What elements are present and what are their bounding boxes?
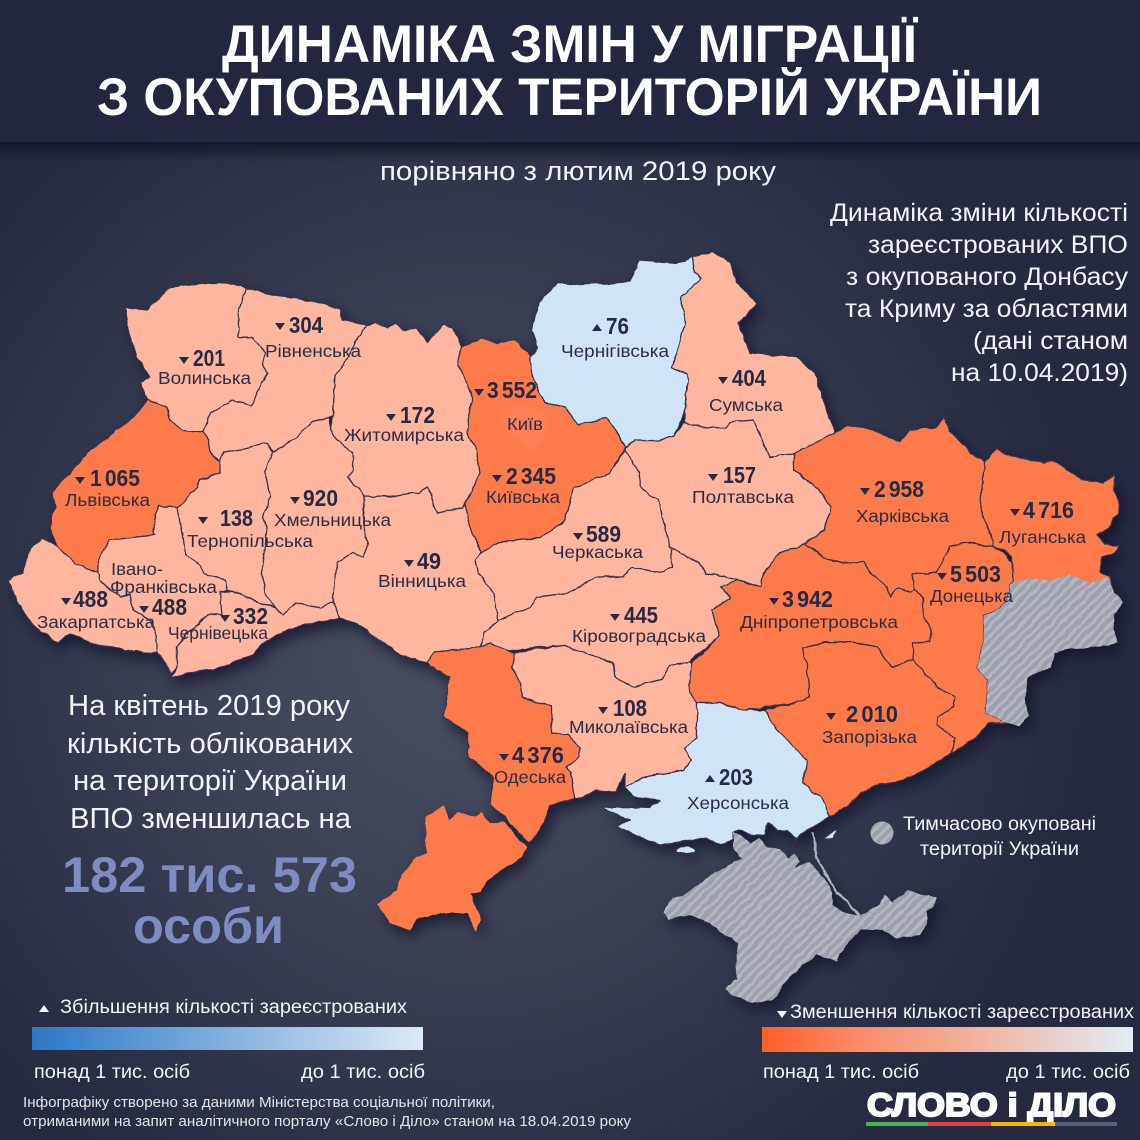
- label: Cherkasy: 589: [586, 521, 621, 547]
- label: Cherkasy: [552, 521, 643, 562]
- legend scale labels: до 1 тис. осіб: [301, 1062, 425, 1083]
- region: Luhansk: [980, 448, 1120, 590]
- legend scale labels: понад 1 тис. осіб: [763, 1062, 919, 1083]
- region: Kyiv city: [500, 405, 547, 457]
- label: Zaporizhzhia: 2 010: [846, 701, 898, 727]
- icon: hatched circle: [870, 822, 894, 844]
- occupied territories text: [903, 814, 1096, 860]
- label: Ivano-Frankivsk: 488: [152, 594, 187, 620]
- label: Odesa: Одеська: [494, 767, 566, 787]
- subtitle: порівняно з лютим 2019 року: [380, 156, 777, 186]
- source note: отриманими на запит аналітичного порталу «Слово і Діло» станом на 18.04.2019 року: [23, 1113, 632, 1130]
- legend scale labels: [34, 1062, 425, 1083]
- label: Kharkiv: Харківська: [856, 506, 949, 526]
- region: Kirovohrad: [480, 547, 739, 687]
- label: Mykolaiv: [569, 695, 688, 737]
- key figure: [62, 847, 357, 954]
- label: Mykolaiv: 108: [613, 695, 647, 721]
- label: Zakarpattia: Закарпатська: [37, 612, 155, 632]
- label: Kyiv oblast: 2 345: [506, 463, 556, 489]
- label: Vinnytsia: Вінницька: [378, 571, 466, 591]
- label: Kyiv city: [474, 377, 543, 434]
- label: Sumy: [709, 365, 783, 415]
- label: Zakarpattia: [37, 586, 155, 632]
- label: Cherkasy: Черкаська: [552, 542, 643, 562]
- region: Vinnytsia: [333, 487, 499, 663]
- label: Donetsk: 5 503: [950, 561, 1001, 587]
- label: Zaporizhzhia: [822, 701, 917, 747]
- region: Zaporizhzhia: [765, 642, 955, 817]
- legend: occupied territories: [870, 814, 1096, 860]
- region: Kharkiv: [793, 417, 993, 597]
- label: Zhytomyr: [344, 402, 464, 445]
- occupied territories text: території України: [920, 839, 1079, 860]
- occupied Crimea: [663, 832, 937, 1002]
- label: Kyiv city: Київ: [507, 414, 543, 434]
- logo colour strip: [866, 1122, 1117, 1126]
- label: Kyiv oblast: Київська: [486, 487, 560, 507]
- label: Kirovohrad: [572, 602, 706, 646]
- region: Donetsk: [912, 542, 1013, 753]
- label: Kherson: [687, 764, 789, 813]
- label: Poltava: 157: [723, 462, 756, 488]
- legend scale labels: [763, 1062, 1130, 1083]
- label: Luhansk: Луганська: [999, 527, 1086, 547]
- summary text: на території України: [73, 765, 347, 797]
- logo wordmark: СЛОВО і ДІЛО: [867, 1087, 1116, 1123]
- label: Khmelnytskyi: 920: [303, 485, 338, 511]
- map description text: (дані станом: [973, 327, 1128, 355]
- legend heading: Зменшення кількості зареєстрованих: [790, 1002, 1135, 1023]
- legend scale labels: понад 1 тис. осіб: [34, 1062, 190, 1083]
- label: Chernihiv: Чернігівська: [561, 341, 669, 361]
- map description text: та Криму за областями: [845, 295, 1128, 323]
- label: Volyn: Волинська: [158, 368, 251, 388]
- label: Zhytomyr: 172: [400, 402, 435, 428]
- label: Vinnytsia: 49: [417, 548, 441, 574]
- label: Ternopil: 138: [220, 505, 253, 531]
- label: Zhytomyr: Житомирська: [344, 425, 464, 445]
- label: Chernivtsi: 332: [233, 603, 268, 629]
- label: Lviv: Львівська: [65, 490, 150, 510]
- label: Dnipropetrovsk: Дніпропетровська: [740, 612, 898, 632]
- region: Ivano-Frankivsk: [98, 506, 227, 673]
- label: Dnipropetrovsk: 3 942: [782, 586, 833, 612]
- gradient bar: [32, 1027, 423, 1050]
- map description text: Динаміка зміни кількості: [830, 199, 1128, 227]
- label: Lviv: 1 065: [90, 465, 140, 491]
- region: Zhytomyr: [330, 322, 480, 513]
- summary text: ВПО зменшилась на: [70, 803, 352, 835]
- gradient bar: [762, 1027, 1133, 1052]
- region: Sumy: [672, 252, 835, 457]
- label: Kirovohrad: 445: [624, 602, 658, 628]
- region: Chernivtsi: [172, 592, 340, 678]
- map labels: [37, 312, 1086, 813]
- label: Kyiv oblast: [486, 463, 560, 507]
- label: Kherson: 203: [719, 764, 753, 790]
- label: Kharkiv: 2 958: [874, 476, 924, 502]
- label: Poltava: [692, 462, 794, 507]
- label: Zaporizhzhia: Запорізька: [822, 727, 917, 747]
- label: Volyn: [158, 345, 251, 388]
- label: Zakarpattia: 488: [73, 586, 108, 612]
- Arabat spit: [813, 832, 860, 916]
- label: Ivano-Frankivsk: Франківська: [110, 577, 217, 597]
- summary text: кількість облікованих: [67, 728, 353, 760]
- header band: [0, 0, 1140, 162]
- label: Khmelnytskyi: [274, 485, 391, 530]
- icon: up triangle: [39, 1005, 49, 1012]
- region: Zakarpattia: [8, 538, 157, 653]
- label: Odesa: [494, 742, 566, 787]
- key figure: особи: [133, 898, 284, 954]
- source note: Інфографіку створено за даними Міністерства соціальної політики,: [23, 1094, 495, 1111]
- label: Ternopil: Тернопільська: [187, 531, 313, 551]
- region: Chernihiv: [531, 257, 701, 447]
- region: Ternopil: [177, 443, 275, 608]
- label: Chernivtsi: [168, 603, 268, 643]
- region: Odesa: [426, 643, 579, 843]
- title: З ОКУПОВАНИХ ТЕРИТОРІЙ УКРАЇНИ: [97, 66, 1042, 127]
- label: Donetsk: [930, 561, 1013, 606]
- region: Kyiv oblast: [458, 338, 625, 553]
- map of Ukraine: [8, 252, 1123, 1002]
- legend heading: Збільшення кількості зареєстрованих: [60, 997, 408, 1018]
- region: Volyn: [125, 282, 268, 432]
- map description text: зареєстрованих ВПО: [868, 231, 1128, 259]
- label: Luhansk: 4 716: [1023, 497, 1074, 523]
- label: Ivano-Frankivsk: [110, 559, 217, 620]
- label: Kyiv city: 3 552: [487, 377, 537, 403]
- label: Mykolaiv: Миколаївська: [569, 717, 688, 737]
- label: Odesa: 4 376: [512, 742, 564, 768]
- source note: [23, 1094, 632, 1130]
- label: Donetsk: Донецька: [930, 586, 1013, 606]
- label: Chernihiv: [561, 313, 669, 361]
- summary text: [67, 690, 353, 835]
- label: Luhansk: [999, 497, 1086, 547]
- region: Dnipropetrovsk: [689, 545, 932, 710]
- label: Kharkiv: [856, 476, 949, 526]
- label: Rivne: 304: [289, 312, 323, 338]
- map description text: з окупованого Донбасу: [846, 263, 1129, 291]
- small islands: [677, 830, 836, 853]
- icon: down triangle: [777, 1011, 787, 1018]
- legend: increase: [32, 997, 425, 1083]
- label: Vinnytsia: [378, 548, 466, 591]
- label: Rivne: [265, 312, 361, 361]
- key figure: 182 тис. 573: [62, 847, 357, 903]
- label: Volyn: 201: [193, 345, 225, 371]
- region: Khmelnytskyi: [262, 418, 368, 615]
- region: Odesa south: [377, 805, 527, 932]
- logo: [866, 1087, 1117, 1126]
- region: Lviv: [50, 400, 220, 573]
- region: Kherson: [601, 703, 829, 852]
- region: Rivne: [203, 288, 367, 462]
- label: Kirovohrad: Кіровоградська: [572, 626, 706, 646]
- label: Ivano-Frankivsk: Івано-: [111, 559, 163, 579]
- region: Mykolaiv: [512, 645, 697, 798]
- occupied Donbas: [977, 575, 1123, 727]
- label: Poltava: Полтавська: [692, 487, 794, 507]
- legend: decrease: [762, 1002, 1135, 1083]
- label: Rivne: Рівненська: [265, 341, 361, 361]
- map description text: на 10.04.2019): [951, 359, 1128, 387]
- label: Sumy: 404: [732, 365, 766, 391]
- occupied territories text: Тимчасово окуповані: [903, 814, 1096, 835]
- label: Khmelnytskyi: Хмельницька: [274, 510, 391, 530]
- label: Chernivtsi: Чернівецька: [168, 623, 268, 643]
- label: Chernihiv: 76: [606, 313, 629, 339]
- label: Ternopil: [187, 505, 313, 551]
- label: Dnipropetrovsk: [740, 586, 898, 632]
- label: Kherson: Херсонська: [687, 793, 789, 813]
- title: [97, 15, 1042, 127]
- map description text: [830, 199, 1129, 387]
- summary text: На квітень 2019 року: [68, 690, 350, 722]
- legend scale labels: до 1 тис. осіб: [1006, 1062, 1130, 1083]
- region: Poltava: [625, 420, 831, 587]
- region: Cherkasy: [475, 450, 672, 620]
- title: ДИНАМІКА ЗМІН У МІГРАЦІЇ: [222, 15, 918, 74]
- label: Sumy: Сумська: [709, 395, 783, 415]
- label: Lviv: [65, 465, 150, 510]
